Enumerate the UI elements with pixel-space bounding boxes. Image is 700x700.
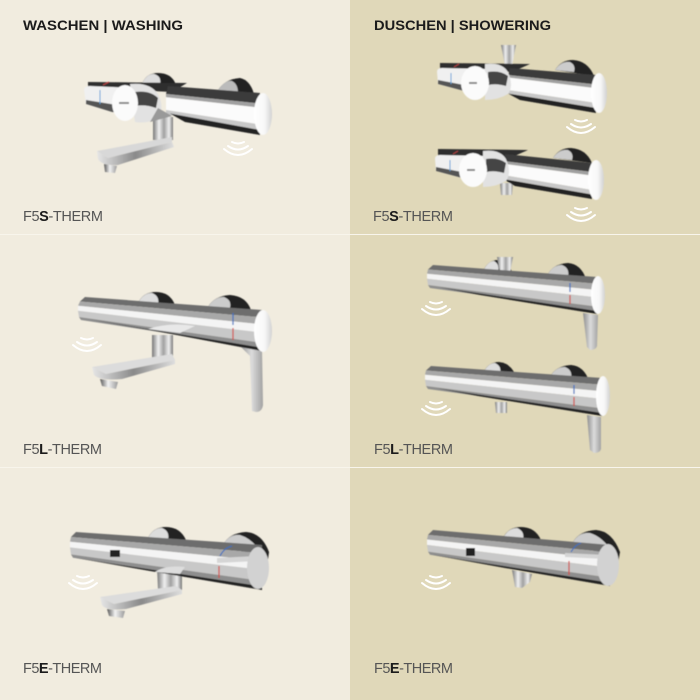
icon: sensor waves	[224, 142, 252, 155]
heading: washing: WASCHEN | WASHING	[23, 17, 183, 33]
row divider lower	[0, 467, 700, 468]
panel: washing background	[0, 0, 350, 700]
icon: sensor waves	[422, 576, 450, 589]
icon: sensor waves	[567, 120, 595, 133]
faucet: F5E washing	[70, 527, 269, 618]
icon: sensor waves	[422, 302, 450, 315]
label: F5E washing: F5E-THERM	[23, 661, 102, 677]
label: F5E showering: F5E-THERM	[374, 661, 453, 677]
icon: sensor waves	[73, 338, 101, 351]
faucet: F5E showering	[427, 527, 620, 588]
label: F5S washing: F5S-THERM	[23, 209, 103, 225]
faucet: F5S showering lower	[435, 148, 604, 200]
label: F5L washing: F5L-THERM	[23, 442, 102, 458]
faucet: F5S washing	[84, 73, 272, 173]
label: F5S showering: F5S-THERM	[373, 209, 453, 225]
label: F5L showering: F5L-THERM	[374, 442, 453, 458]
faucet: F5L washing	[78, 292, 272, 412]
icon: sensor waves	[69, 576, 97, 589]
heading: showering: DUSCHEN | SHOWERING	[374, 17, 551, 33]
icon: sensor waves	[422, 402, 450, 415]
faucet: F5L showering upper	[427, 257, 605, 350]
faucet: F5S showering upper	[437, 45, 607, 113]
icon: sensor waves	[567, 208, 595, 221]
faucet: F5L showering lower	[425, 362, 610, 453]
row divider upper	[0, 234, 700, 235]
panel: showering background	[350, 0, 700, 700]
